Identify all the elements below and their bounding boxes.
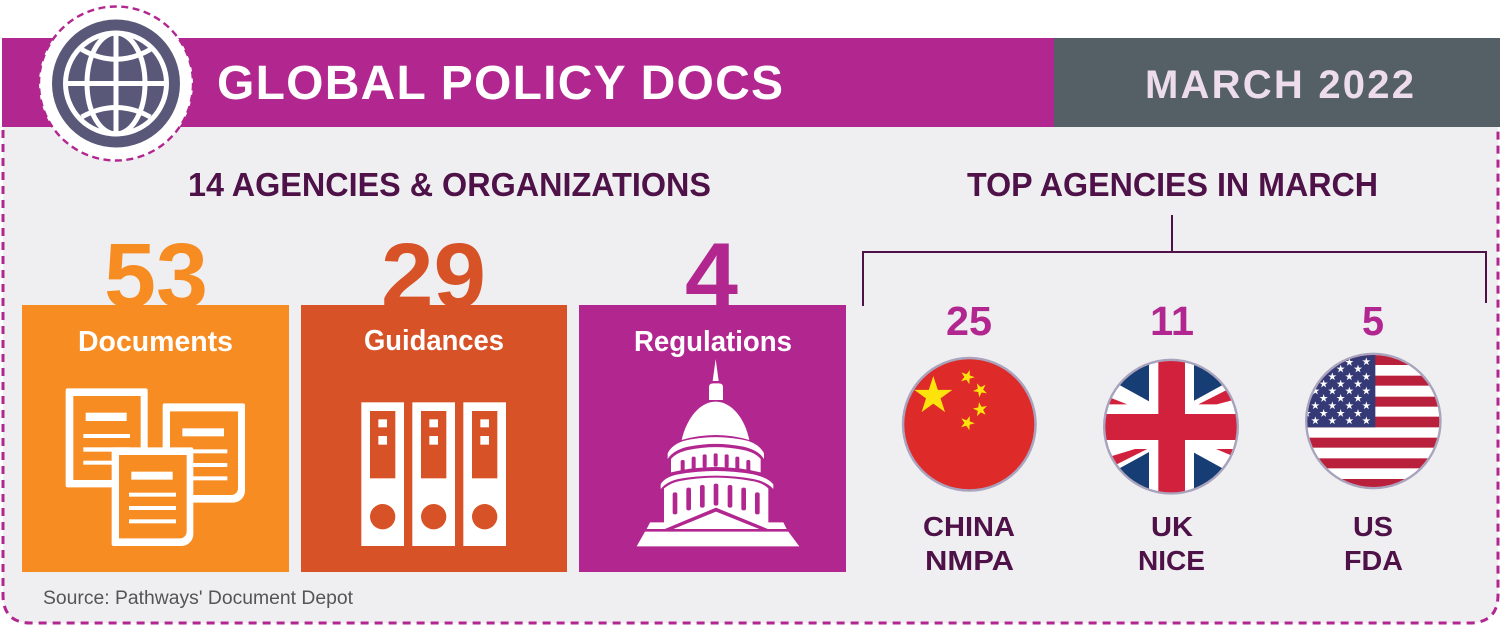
number: 29: 29 [381,225,486,327]
icon: China flag [902,357,1037,492]
value: China 25: 25 [946,298,992,344]
header banner [2,38,1500,127]
number: 4: 4 [685,225,738,327]
panel: background [3,127,1498,623]
panel: documents [22,305,289,572]
label: guidances: Guidances [364,325,504,357]
label: UK NICE [1138,511,1205,576]
label: US FDA: US [1353,511,1393,542]
number: 53: 53 [104,225,208,327]
panel: guidances [301,305,567,572]
value: US 5: 5 [1362,298,1384,344]
heading: top agencies: TOP AGENCIES IN MARCH [967,166,1378,203]
icon: documents [66,388,245,546]
panel: regulations [579,305,846,572]
label: China NMPA: CHINA [923,511,1015,542]
label: regulations: Regulations [634,326,792,358]
label: China NMPA: NMPA [925,545,1014,576]
value: UK 11: 11 [1150,298,1194,344]
date: MARCH 2022 [1145,63,1414,107]
title: GLOBAL POLICY DOCS [217,57,783,110]
heading: agencies and organizations: 14 AGENCIES & ORGANIZATIONS [188,166,711,203]
bracket connector [863,215,1486,306]
label: documents: Documents [78,326,233,358]
icon: UK flag [1103,358,1239,495]
source note: Source: Pathways' Document Depot [43,588,354,609]
label: UK NICE: NICE [1138,545,1205,576]
icon: US flag [1303,353,1442,490]
label: US FDA: FDA [1344,545,1403,576]
label: US FDA [1344,511,1403,576]
icon: capitol building [637,359,799,546]
icon: binders [361,402,506,546]
icon: globe [39,6,193,160]
label: China NMPA [923,511,1015,576]
label: UK NICE: UK [1151,511,1193,542]
